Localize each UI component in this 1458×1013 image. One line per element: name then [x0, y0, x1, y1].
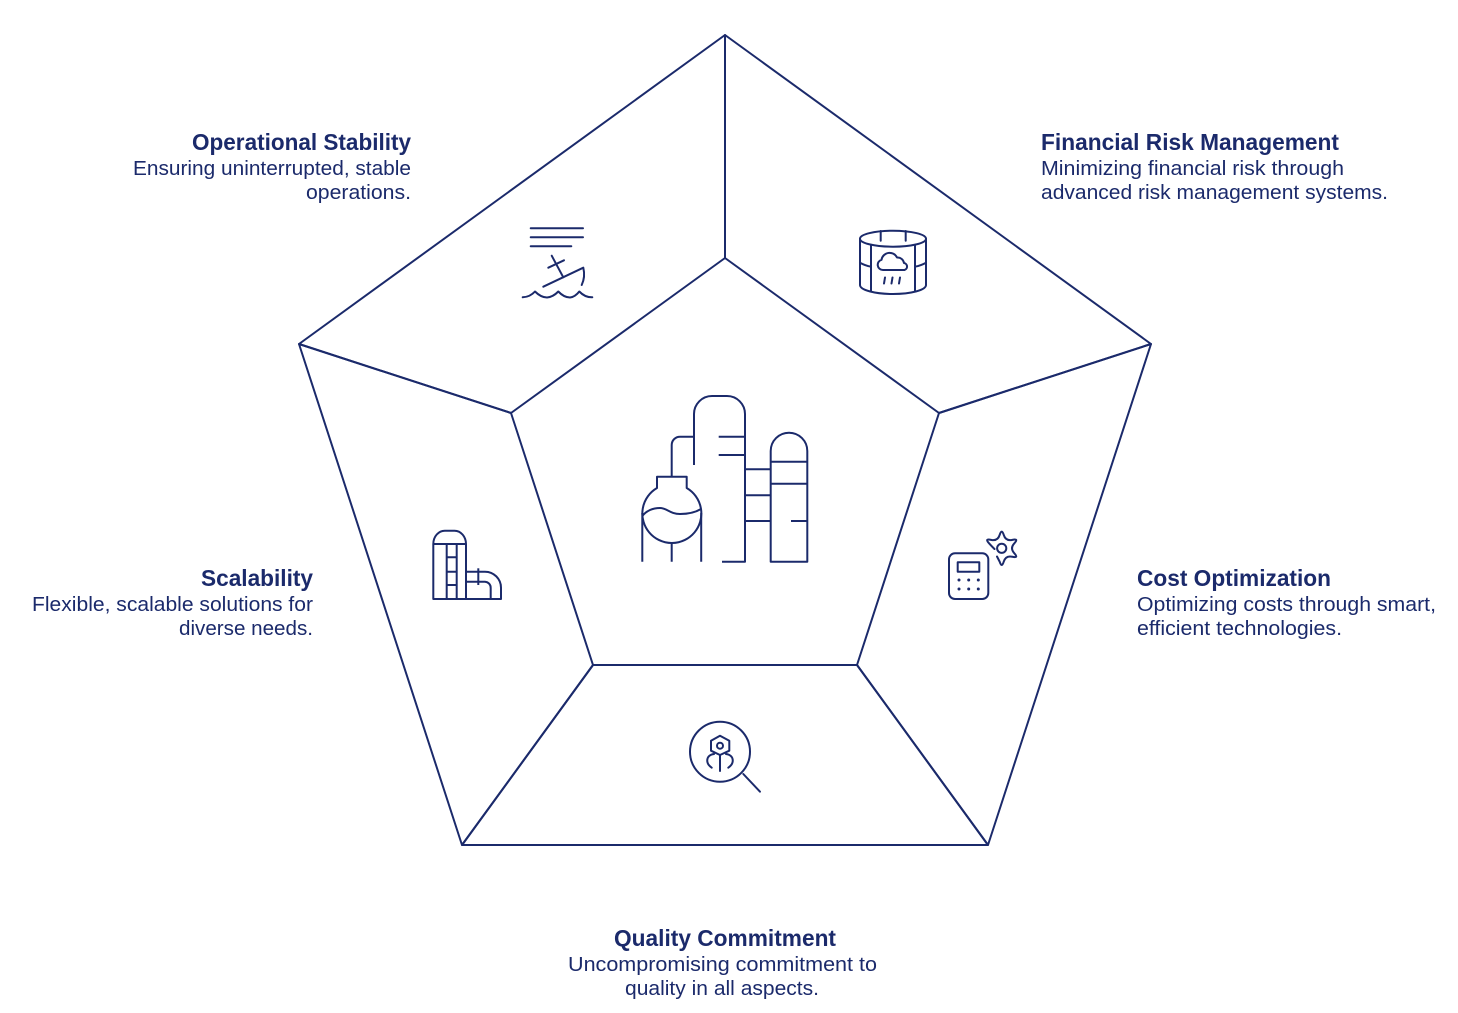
connecting pipe [672, 437, 694, 477]
label: scalability: Scalability [201, 565, 313, 591]
label: operational stability: Operational Stability [192, 129, 411, 155]
label: financial risk management: Minimizing financial risk through [1041, 158, 1344, 180]
connectors [745, 469, 771, 521]
label: quality commitment: Uncompromising commitment to [568, 954, 877, 976]
icon: sinking ship [523, 228, 592, 298]
segment: cost optimization [857, 344, 1151, 845]
label: financial risk management: Financial Risk Management [1041, 129, 1339, 155]
label: quality commitment [568, 925, 877, 1000]
label: cost optimization: efficient technologies. [1137, 618, 1342, 640]
label: quality commitment: Quality Commitment [614, 925, 836, 951]
icon: quality magnifier [690, 722, 760, 792]
segment: scalability [299, 344, 593, 845]
icon: tank with rain cloud [860, 231, 926, 294]
label: operational stability: Ensuring uninterrupted, stable [133, 158, 411, 180]
segment: quality commitment [462, 665, 988, 845]
short tower [771, 433, 807, 562]
label: cost optimization [1137, 565, 1436, 640]
flask vessel [642, 477, 701, 543]
label: operational stability: operations. [306, 182, 411, 204]
label: scalability: Flexible, scalable solutions for [32, 594, 313, 616]
label: cost optimization: Cost Optimization [1137, 565, 1331, 591]
icon: calculator and gear [949, 532, 1016, 599]
segment: financial risk management [725, 35, 1151, 413]
label: financial risk management [1041, 129, 1388, 204]
icon: refinery center [642, 396, 807, 562]
tall distillation column [694, 396, 745, 562]
label: quality commitment: quality in all aspects. [625, 978, 819, 1000]
pentagon diagram [299, 35, 1151, 845]
icon: silo and pipe [433, 531, 501, 599]
label: cost optimization: Optimizing costs through smart, [1137, 594, 1436, 616]
label: financial risk management: advanced risk management systems. [1041, 182, 1388, 204]
label: scalability [32, 565, 313, 640]
label: scalability: diverse needs. [179, 618, 313, 640]
segment: operational stability [299, 35, 725, 413]
label: operational stability [133, 129, 411, 204]
